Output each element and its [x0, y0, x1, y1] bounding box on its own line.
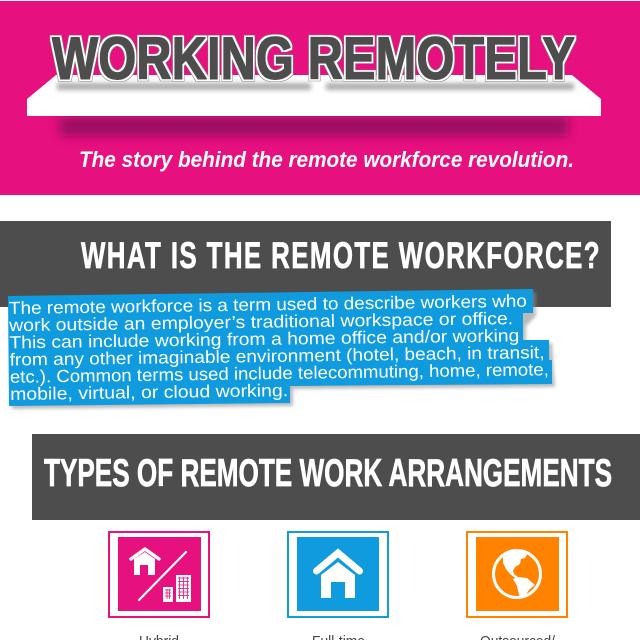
definition text block: The remote workforce is a term used to describe workers who — [9, 291, 527, 318]
definition text block: mobile, virtual, or cloud working. — [10, 380, 288, 404]
arrangement: full-time — [288, 532, 388, 640]
icon: globe — [467, 532, 567, 617]
definition text block: work outside an employer’s traditional workspace or office. — [8, 308, 513, 335]
subtitle: The story behind the remote workforce revolution. — [79, 147, 574, 172]
definition text block: etc.). Common terms used include telecommuting, home, remote, — [10, 359, 549, 387]
arrangement: outsourced — [467, 532, 567, 640]
banner — [0, 1, 640, 195]
icon: house and office buildings — [109, 532, 209, 617]
definition text block — [8, 289, 555, 409]
shelf shadow — [60, 117, 568, 136]
definition text block: from any other imaginable environment (hotel, beach, in transit, — [9, 342, 545, 370]
section header: what is the remote workforce — [0, 221, 611, 307]
section header: types of remote work arrangements — [32, 434, 640, 520]
arrangement: hybrid — [109, 532, 209, 640]
shelf — [27, 75, 601, 116]
icon: house — [288, 532, 388, 617]
definition text block: This can include working from a home office and/or working — [9, 325, 519, 352]
